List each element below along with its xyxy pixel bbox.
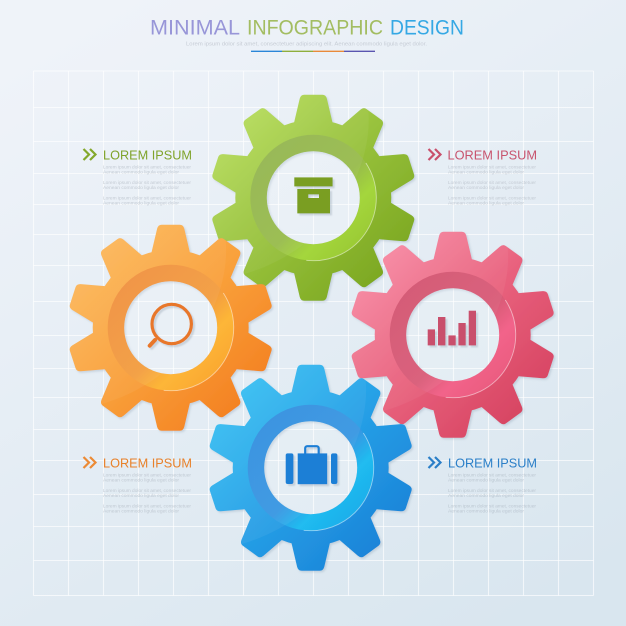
title underline bbox=[251, 50, 375, 52]
title bbox=[150, 16, 464, 39]
body text: green bbox=[103, 164, 191, 206]
heading: green: LOREM IPSUM bbox=[103, 148, 192, 162]
heading: orange: LOREM IPSUM bbox=[103, 455, 192, 470]
icon: blue chevrons bbox=[428, 457, 440, 468]
body text: pink: Lorem ipsum dolor sit amet, consectetuer bbox=[448, 196, 536, 200]
body text: green: Aenean commodo ligula eget dolor bbox=[103, 200, 179, 206]
body text: pink: Aenean commodo ligula eget dolor bbox=[448, 170, 524, 175]
icon: briefcase bbox=[286, 446, 337, 484]
body text: orange: Aenean commodo ligula eget dolor bbox=[103, 478, 179, 482]
body text: pink: Aenean commodo ligula eget dolor bbox=[448, 200, 524, 206]
title: DESIGN bbox=[390, 16, 464, 39]
body text: pink: Lorem ipsum dolor sit amet, consectetuer bbox=[448, 164, 536, 170]
body text: orange: Aenean commodo ligula eget dolor bbox=[103, 508, 179, 514]
icon: magnifier bbox=[150, 304, 191, 346]
body text: blue bbox=[448, 472, 536, 514]
icon: pink chevrons bbox=[428, 149, 440, 160]
body text: blue: Lorem ipsum dolor sit amet, consectetuer bbox=[448, 472, 536, 478]
body text: blue: Lorem ipsum dolor sit amet, consectetuer bbox=[448, 504, 536, 508]
body text: pink: Lorem ipsum dolor sit amet, consectetuer bbox=[448, 180, 536, 185]
icon: orange chevrons bbox=[84, 457, 96, 468]
heading: pink: LOREM IPSUM bbox=[448, 148, 537, 162]
icon: bar chart bbox=[428, 311, 476, 345]
body text: blue: Aenean commodo ligula eget dolor bbox=[448, 508, 524, 514]
body text: green: Lorem ipsum dolor sit amet, consectetuer bbox=[103, 180, 191, 185]
body text: green: Lorem ipsum dolor sit amet, consectetuer bbox=[103, 164, 191, 170]
body text: pink: Aenean commodo ligula eget dolor bbox=[448, 185, 524, 190]
title: MINIMAL bbox=[150, 16, 240, 39]
body text: pink bbox=[448, 164, 536, 206]
icon: archive box bbox=[294, 177, 333, 213]
body text: blue: Aenean commodo ligula eget dolor bbox=[448, 478, 524, 482]
gear: blue bbox=[210, 364, 414, 573]
body text: orange: Lorem ipsum dolor sit amet, consectetuer bbox=[103, 488, 191, 493]
body text: blue: Lorem ipsum dolor sit amet, consectetuer bbox=[448, 488, 536, 493]
body text: orange: Lorem ipsum dolor sit amet, consectetuer bbox=[103, 504, 191, 508]
text block: green label bbox=[84, 148, 192, 206]
gear: orange bbox=[70, 224, 274, 433]
body text: orange: Lorem ipsum dolor sit amet, consectetuer bbox=[103, 472, 191, 478]
icon: green chevrons bbox=[84, 149, 96, 160]
gear: green bbox=[212, 94, 416, 303]
text block: blue label bbox=[428, 455, 537, 514]
body text: green: Aenean commodo ligula eget dolor bbox=[103, 170, 179, 175]
body text: green: Aenean commodo ligula eget dolor bbox=[103, 185, 179, 190]
gear: pink bbox=[352, 232, 556, 440]
body text: green: Lorem ipsum dolor sit amet, consectetuer bbox=[103, 196, 191, 200]
title: INFOGRAPHIC bbox=[247, 16, 383, 39]
body text: orange bbox=[103, 472, 191, 514]
text block: pink label bbox=[428, 148, 537, 206]
subtitle: Lorem ipsum dolor sit amet, consectetuer adipiscing elit. Aenean commodo ligula eget dolor. bbox=[186, 42, 427, 48]
text block: orange label bbox=[84, 455, 192, 514]
body text: blue: Aenean commodo ligula eget dolor bbox=[448, 493, 524, 498]
heading: blue: LOREM IPSUM bbox=[448, 455, 537, 470]
body text: orange: Aenean commodo ligula eget dolor bbox=[103, 493, 179, 498]
